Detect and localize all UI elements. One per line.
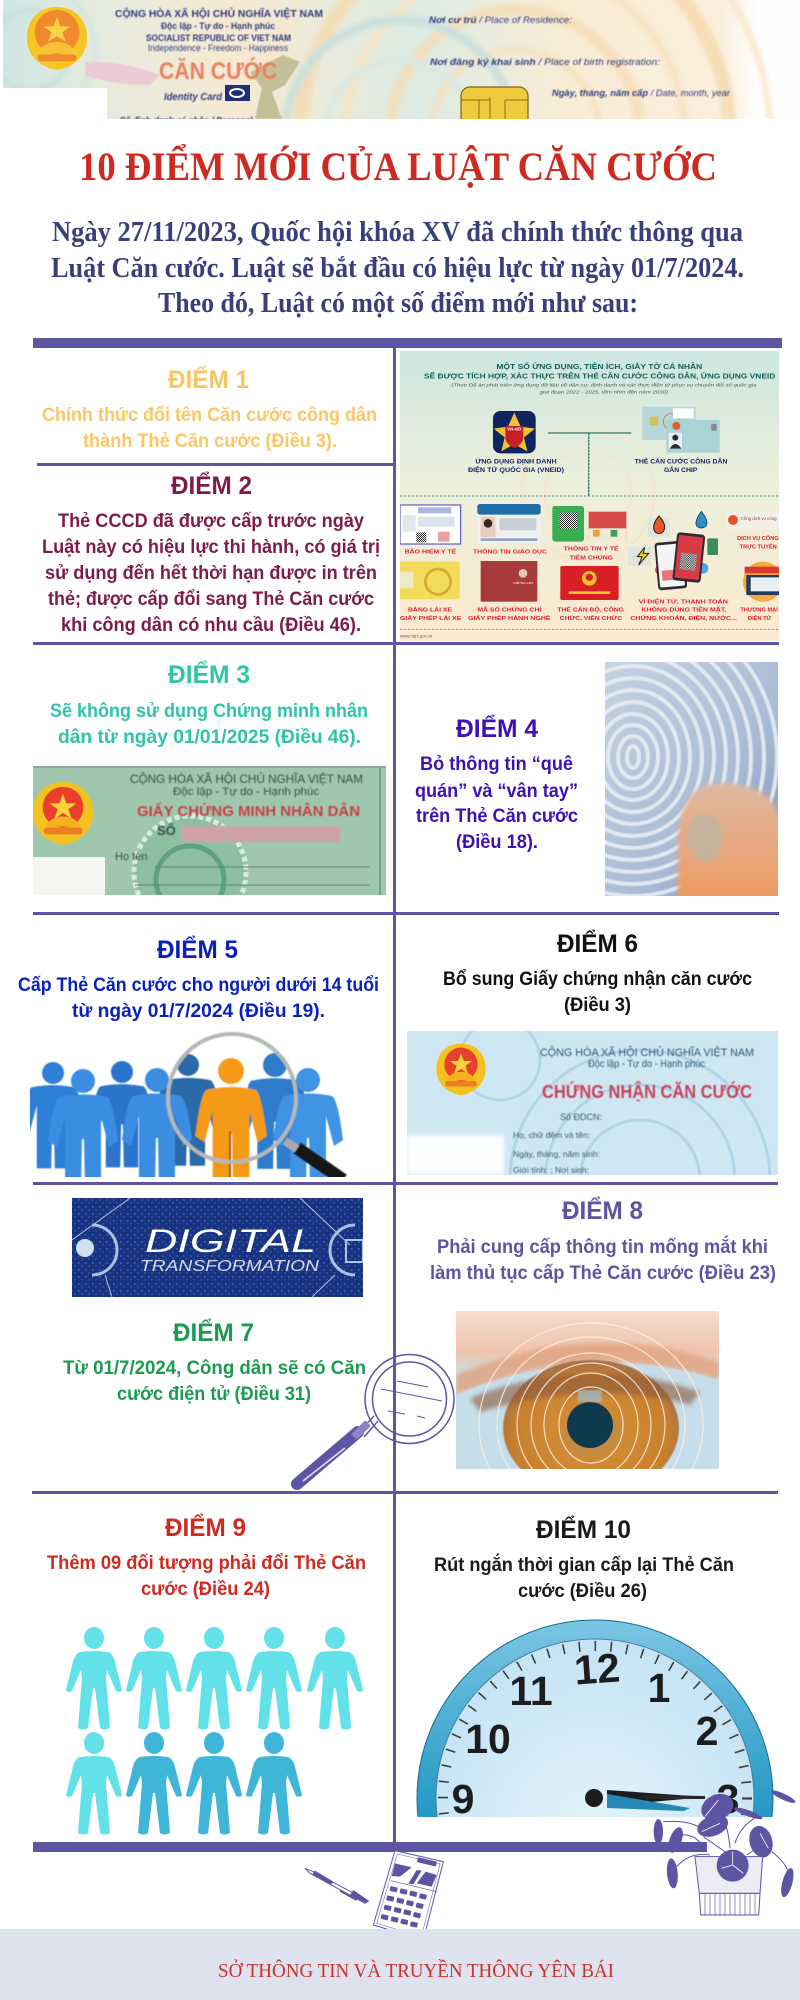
labels: row 2: MÃ SỐ CHỨNG CHỈ: [477, 607, 542, 614]
image: clock: 3: [717, 1776, 739, 1822]
icon: online public service: TRỰC TUYẾN: [740, 544, 777, 551]
icon: online public service: DỊCH VỤ CÔNG: [737, 534, 779, 542]
point 3: [33, 660, 386, 895]
infographic subheading: [451, 382, 757, 394]
text: point 9: [47, 1553, 366, 1600]
infographic heading: MỘT SỐ ỨNG DỤNG, TIỆN ÍCH, GIẤY TỜ CÁ NHÂN: [496, 361, 702, 371]
intro paragraph: Luật Căn cước. Luật sẽ bắt đầu có hiệu lực từ ngày 01/7/2024.: [51, 253, 744, 284]
text: point 4: [415, 754, 578, 853]
card heading text: Số định danh cá nhân / Personal: [120, 115, 253, 127]
labels: row 2: CHỨC, VIÊN CHỨC: [560, 614, 622, 622]
heading: point 9: ĐIỂM 9: [165, 1513, 246, 1542]
icon: online public service: Cổng dịch vụ công: [741, 516, 777, 521]
text: point 2: Thẻ CCCD đã được cấp trước ngày: [58, 511, 364, 532]
labels: e-wallet: VÍ ĐIỆN TỬ, THANH TOÁN: [639, 597, 728, 605]
card fields: [429, 15, 731, 99]
label: chip ID: [634, 458, 727, 472]
icon: pen: [305, 1868, 369, 1903]
image: old ID card: GIẤY CHỨNG MINH NHÂN DÂN: [137, 802, 360, 820]
label: chip ID: THẺ CĂN CƯỚC CÔNG DÂN: [635, 457, 727, 465]
labels: row 2: THẺ CÁN BỘ, CÔNG: [557, 606, 625, 614]
icon: VNeID app: VN-eID: [507, 427, 521, 432]
text: point 2: [42, 511, 380, 636]
card fields: Nơi cư trú / Place of Residence:: [429, 15, 572, 26]
image: clock: 2: [696, 1708, 718, 1754]
label: VNeID: ỨNG DỤNG ĐỊNH DANH: [475, 458, 557, 465]
image: identity certificate: Họ, chữ đệm và tên:: [513, 1130, 590, 1140]
image: old ID card: Họ tên: [115, 851, 147, 863]
heading: point 8: ĐIỂM 8: [562, 1196, 643, 1225]
labels: e-wallet: CHỨNG KHOÁN, ĐIỆN, NƯỚC...: [630, 614, 738, 622]
image: clock: 12: [573, 1644, 621, 1694]
text: point 8: [430, 1236, 776, 1284]
card: education: [477, 504, 541, 543]
image: clock: 10: [465, 1716, 511, 1762]
intro paragraph: Ngày 27/11/2023, Quốc hội khóa XV đã chính thức thông qua: [52, 217, 743, 248]
card: health insurance: [400, 505, 461, 544]
heading: point 10: ĐIỂM 10: [536, 1515, 631, 1544]
card fields: Ngày, tháng, năm cấp / Date, month, year: [552, 88, 731, 99]
card heading text: Independence - Freedom - Happiness: [148, 43, 288, 53]
image: fingerprint: [605, 662, 778, 896]
text: point 2: sử dụng đến hết thời hạn được in trên: [45, 563, 377, 584]
card heading text: SOCIALIST REPUBLIC OF VIET NAM: [146, 33, 291, 44]
text: point 8: làm thủ tục cấp Thẻ Căn cước (Điều 23): [430, 1263, 776, 1284]
connector lines: [400, 433, 779, 629]
heading: point 7: ĐIỂM 7: [173, 1318, 254, 1347]
text: point 10: [434, 1554, 734, 1602]
heading: point 4: ĐIỂM 4: [456, 714, 538, 743]
text: point 6: [443, 969, 752, 1016]
footer text: SỞ THÔNG TIN VÀ TRUYỀN THÔNG YÊN BÁI: [218, 1958, 614, 1982]
footer band: [0, 1929, 800, 2000]
image: digital transformation: [72, 1198, 363, 1297]
text: point 10: Rút ngắn thời gian cấp lại Thẻ Căn: [434, 1554, 734, 1576]
card heading text: CỘNG HÒA XÃ HỘI CHỦ NGHĨA VIỆT NAM: [115, 7, 323, 20]
infographic heading: SẼ ĐƯỢC TÍCH HỢP, XÁC THỰC TRÊN THẺ CĂN CƯỚC CÔNG DÂN, ỨNG DỤNG VNEID: [424, 372, 775, 381]
text: point 5: [18, 975, 379, 1022]
labels: row 1: BẢO HIỂM Y TẾ: [405, 548, 457, 555]
image: identity certificate: Ngày, tháng, năm sinh:: [513, 1149, 600, 1159]
intro paragraph: Theo đó, Luật có một số điểm mới như sau:: [158, 288, 638, 319]
text: point 10: cước (Điều 26): [518, 1581, 647, 1602]
title: 10 ĐIỂM MỚI CỦA LUẬT CĂN CƯỚC: [79, 143, 717, 189]
card heading text: Identity Card: [164, 92, 223, 103]
labels: row 2: [400, 606, 624, 621]
text: point 7: cước điện tử (Điều 31): [117, 1384, 311, 1405]
labels: e-wallet: KHÔNG DÙNG TIỀN MẶT,: [641, 606, 727, 614]
label: VNeID: ĐIỆN TỬ QUỐC GIA (VNEID): [468, 466, 564, 474]
infographic subheading: (Theo Đề án phát triển ứng dụng dữ liệu về dân cư, định danh và xác thực điện tử phục vụ chuyển đổi số quốc gia: [451, 382, 757, 388]
point 5: [18, 935, 379, 1187]
source url: www.mps.gov.vn: [400, 633, 433, 638]
heading: point 5: ĐIỂM 5: [157, 935, 238, 964]
text: point 9: cước (Điều 24): [141, 1579, 270, 1600]
card title: CĂN CƯỚC: [159, 57, 277, 85]
image: identity certificate: Số ĐDCN:: [560, 1112, 602, 1122]
image: identity certificate: Giới tính: ; Nơi sinh:: [513, 1165, 589, 1175]
icon: online public service: [726, 512, 783, 551]
icon: national emblem: [27, 7, 87, 70]
image: clock: 11: [509, 1668, 553, 1714]
icon: card logo: [225, 85, 250, 101]
point 9: [47, 1513, 366, 1834]
image: identity certificate: [407, 1031, 778, 1175]
card: driving licence: [400, 562, 460, 599]
labels: row 1: THÔNG TIN Y TẾ: [564, 545, 619, 553]
text: point 4: (Điều 18).: [456, 832, 538, 853]
text: point 6: (Điều 3): [564, 995, 631, 1016]
intro paragraph: [51, 217, 744, 319]
text: point 4: trên Thẻ Căn cước: [416, 806, 578, 827]
heading: point 6: ĐIỂM 6: [557, 929, 638, 958]
icon: calculator: [373, 1851, 443, 1940]
card: practice certificate: CHỨNG CHỈ: [513, 580, 534, 585]
image: old ID card: SỐ: [157, 823, 176, 838]
labels: row 1: TIÊM CHỦNG: [570, 553, 614, 561]
icon: magnifying glass: [297, 1354, 454, 1484]
text: point 9: Thêm 09 đối tượng phải đổi Thẻ Căn: [47, 1553, 366, 1574]
text: point 1: [42, 405, 377, 452]
label: chip ID: GẮN CHIP: [664, 466, 697, 474]
point 6: [407, 930, 778, 1175]
icon: potted plant: [654, 1788, 797, 1915]
text: point 2: Luật này có hiệu lực thi hành, có giá trị: [42, 537, 380, 558]
infographic heading: [424, 361, 775, 381]
labels: row 1: [405, 546, 618, 560]
image: iris: [456, 1311, 719, 1469]
card: health and vaccination: [552, 506, 626, 542]
text: point 3: [50, 701, 368, 748]
point 7: [63, 1198, 366, 1405]
icon: e-commerce: THƯƠNG MẠI: [740, 608, 778, 614]
text: point 7: Từ 01/7/2024, Công dân sẽ có Căn: [63, 1358, 366, 1379]
image: digital transformation: TRANSFORMATION: [140, 1258, 320, 1275]
card: practice certificate: [481, 561, 537, 602]
image: digital transformation: DIGITAL: [145, 1223, 316, 1259]
labels: e-wallet: [630, 597, 738, 622]
point 4: [416, 662, 778, 896]
text: point 4: quán” và “vân tay”: [415, 781, 578, 802]
labels: row 2: GIẤY PHÉP HÀNH NGHỀ: [468, 614, 551, 622]
header image: ID card banner: [3, 0, 776, 119]
labels: row 2: GIẤY PHÉP LÁI XE: [400, 614, 462, 622]
card heading text: Độc lập - Tự do - Hạnh phúc: [161, 21, 275, 32]
card fields: Nơi đăng ký khai sinh / Place of birth registration:: [430, 57, 660, 68]
icon: chip: [460, 86, 529, 119]
card heading text: [115, 7, 323, 127]
point 2: [42, 471, 380, 636]
image: identity certificate: Độc lập - Tự do - Hạnh phúc: [588, 1059, 705, 1070]
point 10: [417, 1515, 773, 1976]
image: old ID card: CỘNG HÒA XÃ HỘI CHỦ NGHĨA VIỆT NAM: [130, 771, 363, 786]
text: point 7: [63, 1358, 366, 1405]
label: VNeID: [468, 458, 564, 474]
text: point 6: Bổ sung Giấy chứng nhận căn cước: [443, 969, 752, 990]
point 8: [431, 1196, 776, 1469]
text: point 8: Phải cung cấp thông tin mống mắt khi: [437, 1236, 768, 1258]
icon: e-commerce: [740, 562, 783, 622]
labels: row 2: BẰNG LÁI XE: [408, 606, 452, 614]
image: clock: [417, 1620, 773, 1976]
image: people under magnifier: [21, 1034, 343, 1187]
point 1: [42, 365, 377, 452]
heading: point 1: ĐIỂM 1: [168, 365, 249, 394]
text: point 2: thẻ; được cấp đổi sang Thẻ Căn cước: [48, 589, 374, 610]
text: point 4: Bỏ thông tin “quê: [420, 754, 573, 775]
text: point 5: từ ngày 01/7/2024 (Điều 19).: [72, 1001, 325, 1022]
text: point 1: Chính thức đổi tên Căn cước công dân: [42, 405, 377, 426]
labels: row 1: THÔNG TIN GIÁO DỤC: [473, 547, 547, 555]
icon: e-commerce: ĐIỆN TỬ: [748, 614, 772, 622]
icon: VNeID app: [493, 411, 536, 453]
panel: infographic image of integrated apps: [400, 351, 783, 641]
image: old ID card: Độc lập - Tự do - Hạnh phúc: [173, 786, 320, 798]
image: old ID card: [33, 766, 386, 895]
text: point 5: Cấp Thẻ Căn cước cho người dưới 14 tuổi: [18, 975, 379, 996]
heading: point 2: ĐIỂM 2: [171, 471, 252, 500]
heading: point 3: ĐIỂM 3: [168, 660, 250, 689]
dividers: [32, 338, 782, 1852]
icons: nine people: [66, 1627, 363, 1834]
image: identity certificate: CỘNG HÒA XÃ HỘI CHỦ NGHĨA VIỆT NAM: [540, 1046, 754, 1059]
text: point 3: Sẽ không sử dụng Chứng minh nhân: [50, 701, 368, 722]
card: officials: [560, 566, 619, 600]
image: clock: 9: [452, 1776, 474, 1822]
icons: phones and e-wallet: [628, 511, 718, 590]
icon: chip ID cards: [642, 407, 720, 453]
image: clock: 1: [648, 1665, 670, 1711]
text: point 1: thành Thẻ Căn cước (Điều 3).: [83, 431, 337, 452]
text: point 2: khi công dân có nhu cầu (Điều 46).: [61, 615, 361, 636]
text: point 3: dân từ ngày 01/01/2025 (Điều 46).: [58, 727, 361, 748]
infographic subheading: giai đoạn 2022 - 2025, tầm nhìn đến năm 2030): [540, 388, 669, 394]
image: identity certificate: CHỨNG NHẬN CĂN CƯỚC: [542, 1081, 752, 1102]
